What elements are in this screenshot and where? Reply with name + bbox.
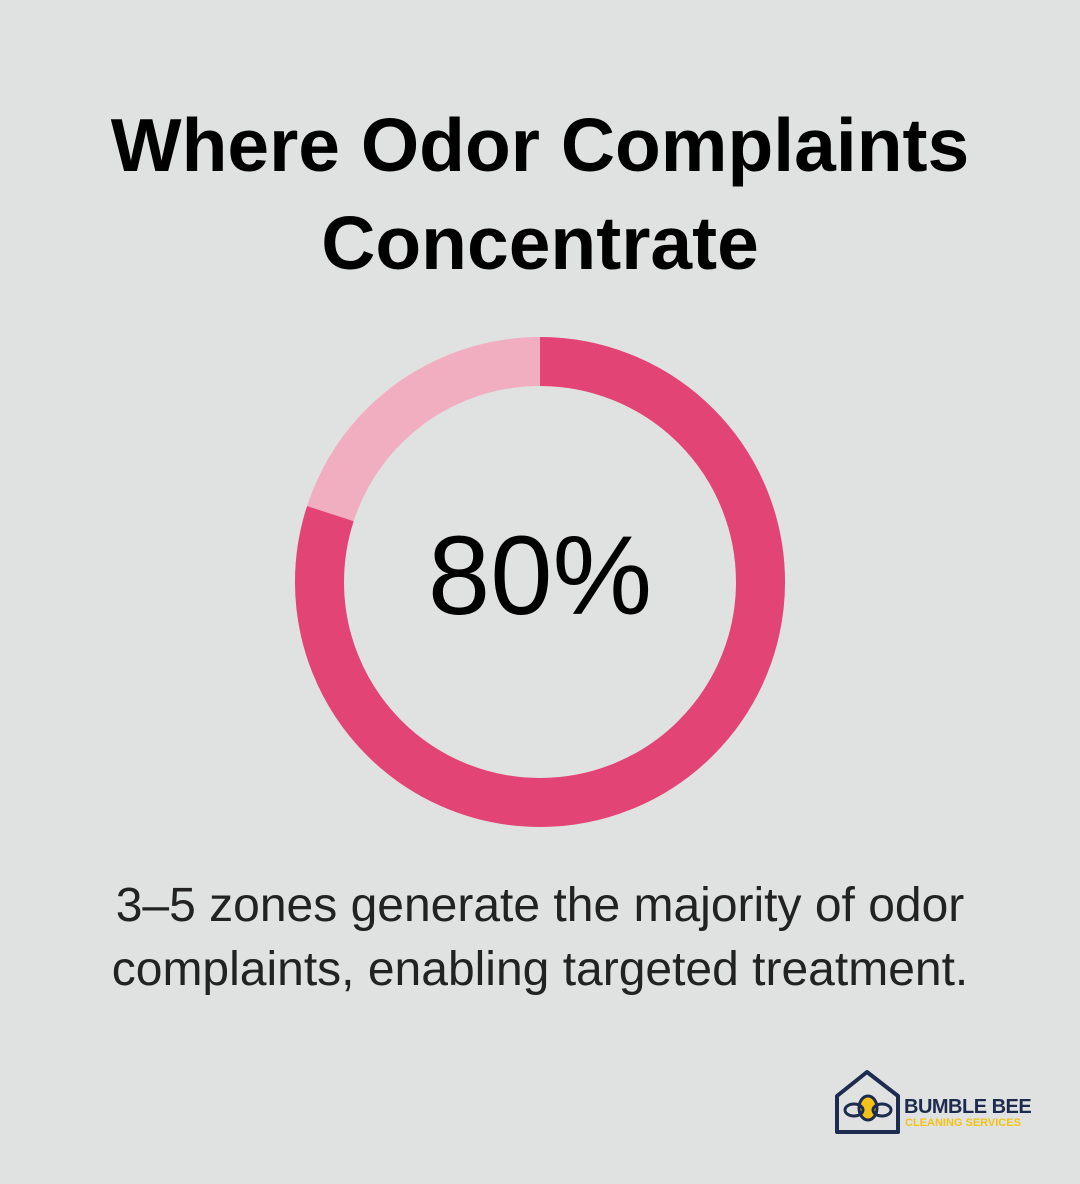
title: Concentrate bbox=[321, 201, 759, 285]
title: Where Odor Complaints bbox=[111, 103, 969, 187]
logo bbox=[835, 1070, 1031, 1134]
logo: BUMBLE BEE bbox=[904, 1096, 1031, 1118]
title bbox=[110, 103, 969, 285]
body text bbox=[112, 879, 968, 996]
logo: CLEANING SERVICES bbox=[905, 1117, 1021, 1129]
body text: 3–5 zones generate the majority of odor bbox=[116, 879, 964, 932]
body text: complaints, enabling targeted treatment. bbox=[112, 943, 968, 996]
donut chart: 80% bbox=[428, 513, 652, 638]
